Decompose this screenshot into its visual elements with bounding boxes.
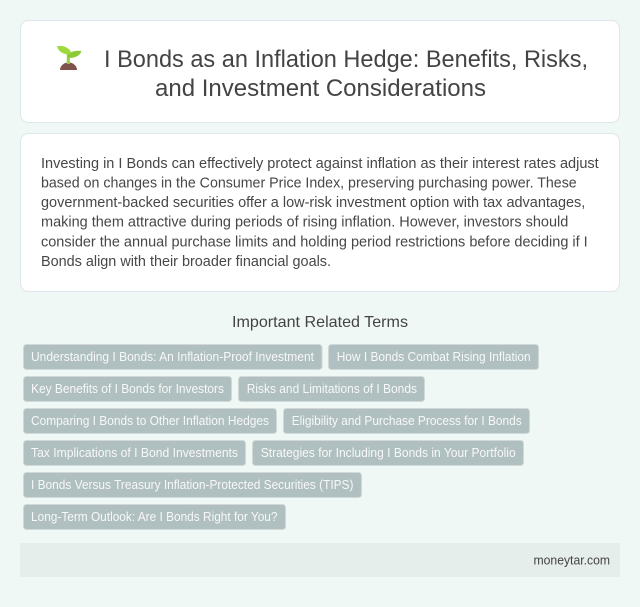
- icon: sprout: [57, 46, 82, 70]
- tag: risks and limitations: Risks and Limitations of I Bonds: [247, 381, 417, 396]
- tag: versus TIPS: [24, 472, 362, 498]
- text block: summary: government-backed securities offer a low-risk investment option with tax advantages,: [41, 195, 585, 211]
- footer source text: moneytar.com: [534, 552, 610, 568]
- text block: summary: consider the annual purchase limits and holding period restrictions before deciding if I: [41, 234, 588, 250]
- tag: key benefits: [24, 376, 232, 402]
- tag: tax implications: Tax Implications of I Bond Investments: [31, 445, 238, 460]
- tag: combat rising inflation: How I Bonds Combat Rising Inflation: [337, 349, 531, 364]
- tag: tax implications: [24, 440, 246, 466]
- text block: summary: making them attractive during periods of rising inflation. However, investors should: [41, 214, 568, 230]
- tag: understanding I bonds: [24, 344, 322, 370]
- text block: summary: [41, 156, 600, 270]
- text block: summary: based on changes in the Consumer Price Index, preserving purchasing power. These: [41, 176, 577, 192]
- heading: title: I Bonds as an Inflation Hedge: Benefits, Risks,: [104, 46, 588, 73]
- tag: key benefits: Key Benefits of I Bonds for Investors: [31, 381, 224, 396]
- panel: title: [20, 20, 620, 122]
- tag: eligibility and purchase: [284, 408, 530, 434]
- tag: comparing hedges: [24, 408, 276, 434]
- heading: important related terms: Important Related Terms: [232, 314, 408, 331]
- tag: combat rising inflation: [328, 344, 538, 370]
- tag: portfolio strategies: [252, 440, 524, 466]
- tag: comparing hedges: Comparing I Bonds to Other Inflation Hedges: [31, 413, 269, 428]
- panel: summary paragraph: [20, 134, 620, 292]
- text block: summary: Bonds align with their broader financial goals.: [41, 254, 331, 270]
- tag: portfolio strategies: Strategies for Including I Bonds in Your Portfolio: [261, 445, 516, 460]
- text block: summary: Investing in I Bonds can effectively protect against inflation as their interest rates adjust: [41, 156, 600, 172]
- tag: long-term outlook: Long-Term Outlook: Are I Bonds Right for You?: [31, 509, 278, 524]
- heading: title: [104, 46, 588, 102]
- heading: title: and Investment Considerations: [155, 75, 486, 102]
- footer: [20, 543, 620, 577]
- tag: long-term outlook: [24, 504, 286, 530]
- tag: eligibility and purchase: Eligibility and Purchase Process for I Bonds: [292, 413, 522, 428]
- tag list: related terms: [24, 344, 538, 530]
- tag: versus TIPS: I Bonds Versus Treasury Inflation-Protected Securities (TIPS): [31, 477, 354, 492]
- tag: understanding I bonds: Understanding I Bonds: An Inflation-Proof Investment: [31, 349, 314, 364]
- tag: risks and limitations: [238, 376, 424, 402]
